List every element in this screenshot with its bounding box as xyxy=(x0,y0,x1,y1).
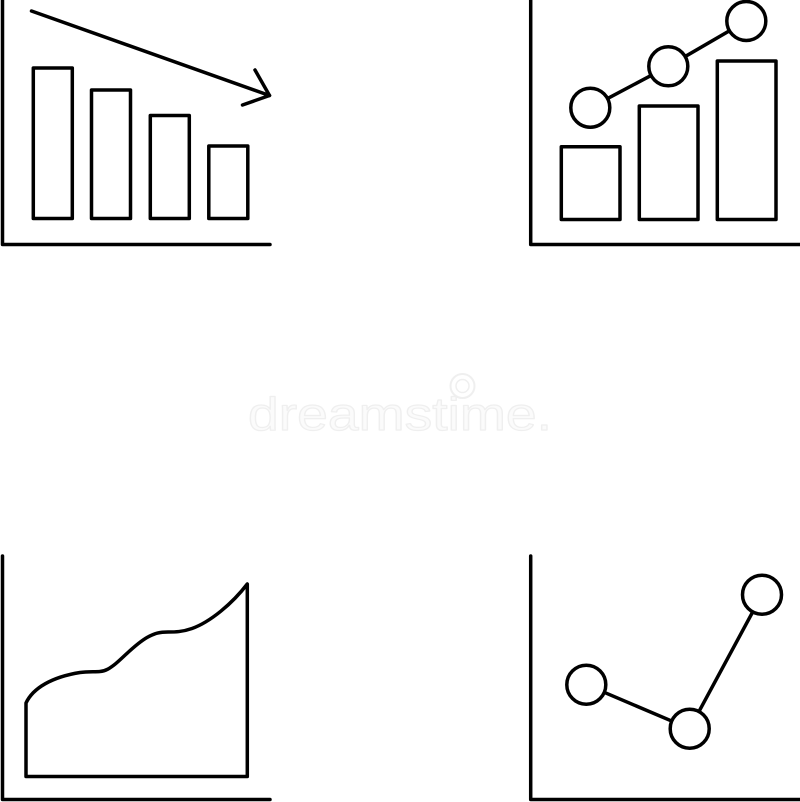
chart: area curve xyxy=(2,556,270,800)
chart: rising bars with line and markers xyxy=(531,0,800,244)
chart: line with three markers xyxy=(531,556,800,800)
watermark xyxy=(248,374,552,440)
watermark: dreamstime. xyxy=(248,388,552,440)
chart: falling bars with arrow xyxy=(2,0,270,244)
